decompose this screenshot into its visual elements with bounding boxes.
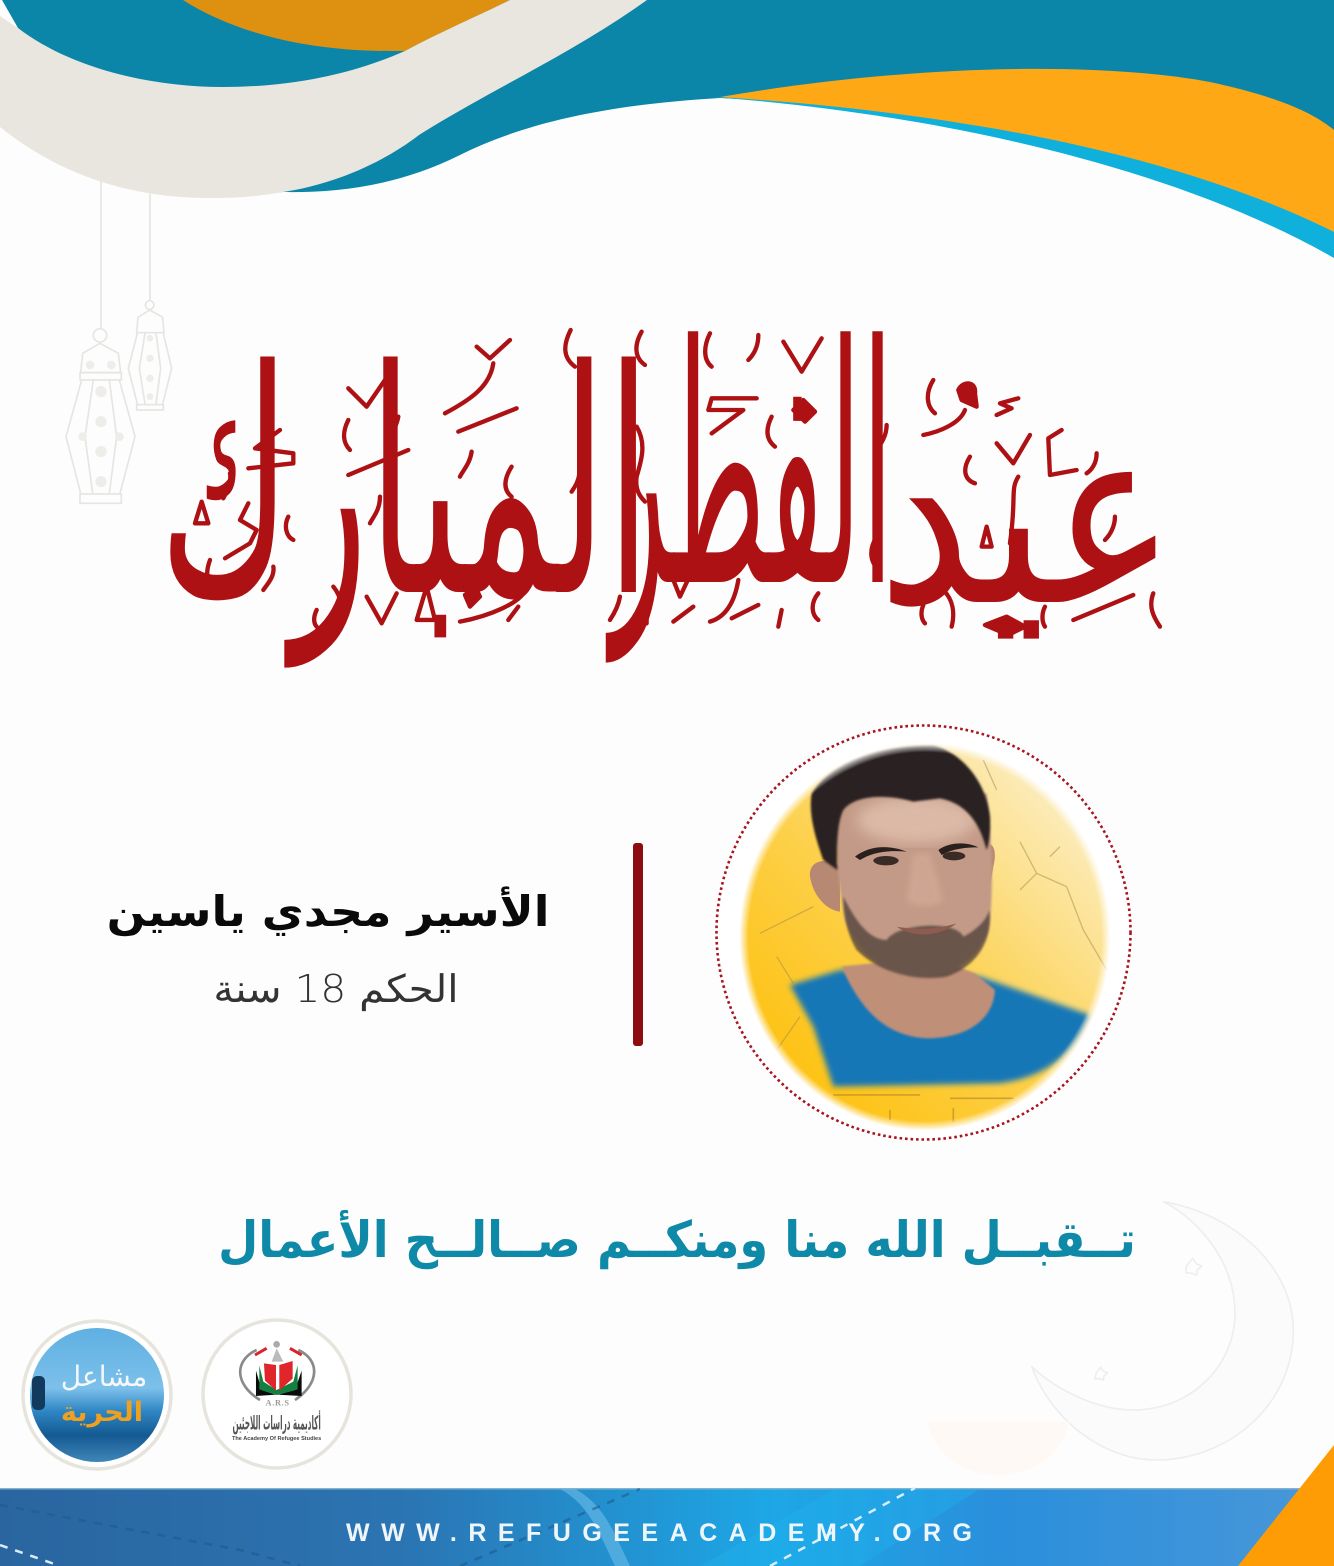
- academy english name: The Academy Of Refugee Studies: [232, 1436, 321, 1442]
- word: eid: عيد: [878, 371, 1176, 662]
- logo: academy of refugee studies: [203, 1320, 351, 1468]
- brows and eyes: [855, 847, 907, 860]
- stars: [1186, 1258, 1202, 1275]
- word: al-fitr: الفطر: [605, 278, 893, 663]
- ear: [810, 861, 840, 912]
- mouth: [897, 923, 957, 934]
- dotted ring: [716, 726, 1130, 1140]
- logo dark notch: [32, 1376, 45, 1410]
- portrait in dotted circle: [716, 726, 1130, 1140]
- small tashkeel ornaments, right half: [670, 333, 1160, 635]
- emblem wreath: [240, 1350, 314, 1400]
- neck: [842, 957, 995, 1038]
- emblem initials: A.R.S: [266, 1399, 290, 1408]
- word: al-mubarak: المبارك: [159, 305, 651, 667]
- sentence: الحكم 18 سنة: [213, 967, 459, 1012]
- photo: [733, 740, 1117, 1137]
- top decorative waves: [0, 0, 1334, 258]
- small tashkeel ornaments, left half: [195, 330, 647, 627]
- big lantern: [66, 180, 135, 503]
- orange corner triangle: [1238, 1445, 1334, 1566]
- hanging lanterns: [66, 180, 172, 503]
- shirt: [790, 970, 1090, 1087]
- small lantern: [128, 193, 172, 410]
- text: أكاديمية دراسات اللاجئين: [232, 1410, 321, 1434]
- website url: WWW.REFUGEEACADEMY.ORG: [346, 1519, 972, 1547]
- wall cracks: [760, 760, 1107, 1050]
- hair: [811, 745, 990, 870]
- greeting line: تــقبــل الله منا ومنكــم صــالــح الأعمال: [218, 1209, 1136, 1269]
- faint rose half circle: [927, 1422, 1070, 1475]
- prisoner name: الأسير مجدي ياسين: [107, 886, 549, 937]
- crescent moon: [927, 1202, 1293, 1475]
- beard: [843, 897, 990, 978]
- calligraphy heading: [159, 278, 1176, 667]
- logo word white: مشاعل: [61, 1360, 147, 1393]
- footer band: [0, 1488, 1334, 1566]
- shirt print: [833, 1095, 1013, 1122]
- logo: freedom torches: [23, 1321, 171, 1469]
- emblem book: [256, 1371, 302, 1396]
- logo word orange: الحرية: [61, 1397, 143, 1428]
- divider bar: [633, 843, 643, 1046]
- face: [836, 793, 992, 977]
